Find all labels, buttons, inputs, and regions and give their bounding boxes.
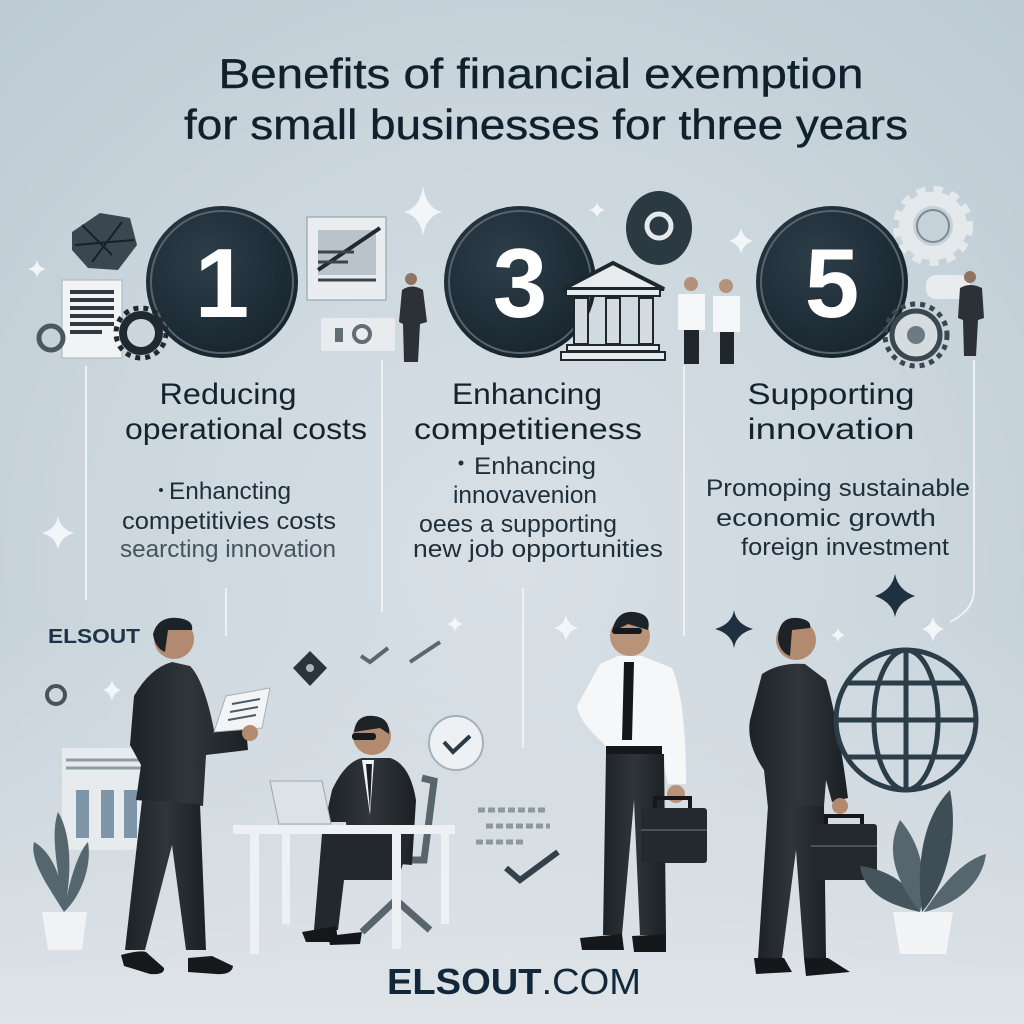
column 2 body text: oees a supporting: [419, 511, 617, 538]
column 2 heading: competitieness: [414, 413, 642, 446]
column 2 body text: [413, 453, 663, 563]
footer brand: ELSOUT.COM: [387, 961, 641, 1002]
column 3 heading: Supporting: [748, 378, 914, 411]
small figure: [399, 273, 427, 362]
icon: dark crumpled globe: [72, 213, 137, 270]
icon: small gear: [885, 304, 947, 366]
number badge 5: 5: [805, 228, 859, 338]
figure: man reading document: [121, 618, 270, 974]
head: [353, 717, 391, 755]
icon: left small ring: [47, 686, 65, 704]
figure: man in white shirt with briefcase: [577, 612, 707, 952]
number badge 1: 1: [195, 228, 249, 338]
column 2 body text: innovavenion: [453, 482, 597, 509]
icon: check badge: [429, 716, 483, 770]
column 1 body text: searcting innovation: [120, 536, 336, 563]
column 2 heading: [414, 378, 642, 446]
torso: [325, 758, 416, 865]
column 3 heading: [748, 378, 914, 446]
icon: chart card: [307, 217, 386, 300]
column 1 heading: operational costs: [125, 413, 367, 446]
number badge 5: [756, 206, 908, 358]
title: [184, 50, 908, 148]
number badge 1: [146, 206, 298, 358]
small figures pair: [678, 277, 740, 364]
number badge 3: 3: [493, 228, 547, 338]
icon: right potted plant: [860, 790, 986, 954]
dark sparkles: [715, 574, 915, 648]
panel: column 3 number and icons: [756, 190, 984, 366]
legs: [314, 834, 412, 930]
column 3 body text: Promoping sustainable: [706, 475, 970, 502]
laptop: [270, 781, 331, 824]
icon: small ring: [39, 326, 63, 350]
column 2 heading: Enhancing: [452, 378, 602, 411]
chair: [362, 778, 434, 934]
icon: pencil check marks: [361, 642, 440, 662]
icon: small card: [321, 318, 395, 351]
icon: bar chart backdrop: [62, 748, 146, 850]
icon: left potted plant: [33, 812, 89, 950]
column 1 heading: [125, 378, 367, 446]
column 1 body text: competitivies costs: [122, 508, 336, 535]
briefcase: [811, 816, 877, 880]
column 1 heading: Reducing: [160, 378, 296, 411]
small figure: [958, 271, 984, 356]
panel: column 1 number and icons: [39, 206, 427, 362]
column 2 body text: Enhancing: [474, 453, 596, 480]
column 3 body text: economic growth: [716, 505, 936, 532]
icon: small pill: [926, 275, 970, 299]
icon: bank building: [561, 263, 665, 360]
briefcase: [641, 798, 707, 863]
icon: faded checklist: [476, 810, 558, 880]
column 1 body text: [120, 478, 336, 563]
small brand label: ELSOUT: [48, 626, 140, 648]
figure: man at desk with laptop: [233, 716, 455, 954]
figure: man in suit with briefcase: [749, 618, 877, 976]
icon: gear: [116, 308, 166, 358]
column 2 body text: new job opportunities: [413, 536, 663, 563]
panel: column 2 number and icons: [444, 191, 740, 364]
column 3 heading: innovation: [748, 413, 914, 446]
column 1 body text: Enhancting: [169, 478, 291, 505]
desk: [233, 825, 455, 954]
title: for small businesses for three years: [184, 101, 908, 148]
title: Benefits of financial exemption: [218, 50, 864, 97]
column 3 body text: foreign investment: [741, 534, 949, 561]
icon: dark ring blob: [626, 191, 692, 265]
decorative sparkles: [28, 186, 944, 702]
icon: small diamond: [293, 651, 327, 686]
icon: globe: [836, 650, 976, 790]
icon: large light gear: [897, 190, 969, 262]
icon: document: [62, 280, 122, 358]
number badge 3: [444, 206, 596, 358]
column 3 body text: [706, 475, 970, 561]
vertical connector lines: [86, 360, 974, 748]
